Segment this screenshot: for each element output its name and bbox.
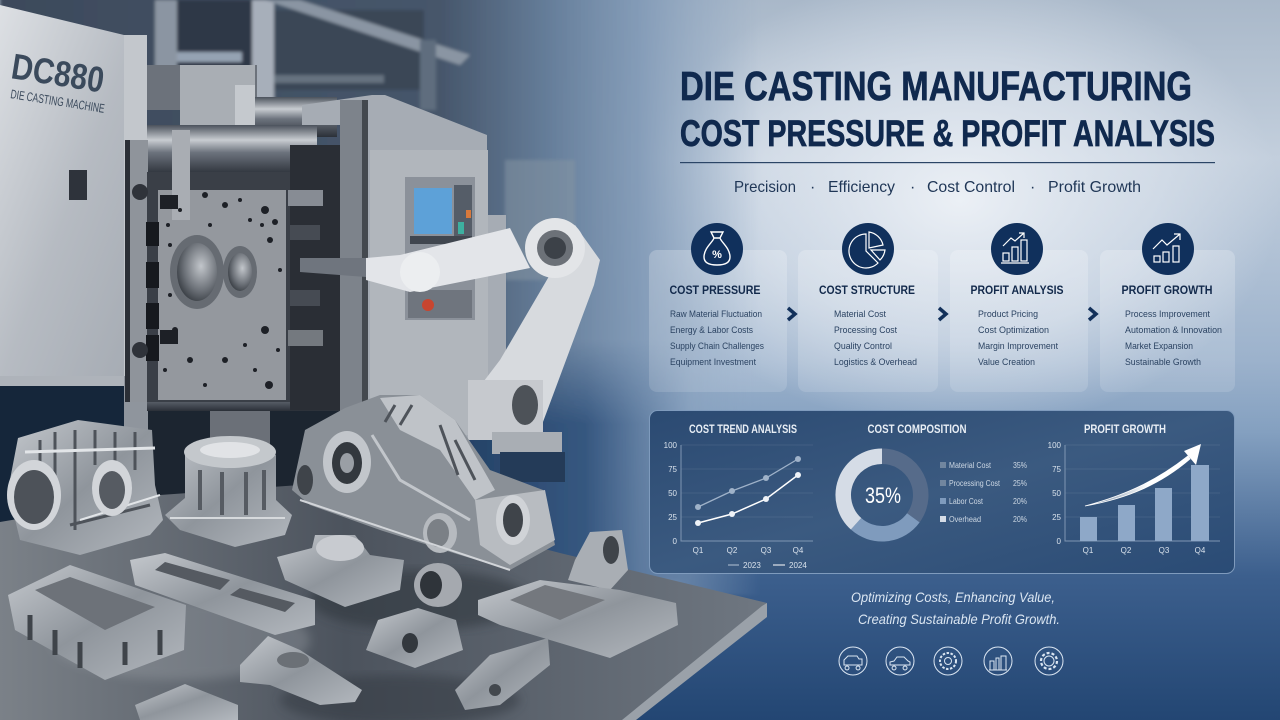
tagline: Cost Control bbox=[927, 179, 1015, 196]
tagline: Efficiency bbox=[828, 179, 895, 196]
closing statement: Optimizing Costs, Enhancing Value, bbox=[851, 589, 1055, 605]
cast part: small cube bbox=[366, 608, 463, 668]
donut legend: Material Cost bbox=[949, 461, 992, 470]
machine main housing with model label bbox=[0, 5, 147, 385]
list: Quality Control bbox=[834, 341, 892, 352]
chart: cost trend analysis: 50 bbox=[668, 489, 678, 498]
list bbox=[978, 309, 1058, 368]
heading: PROFIT ANALYSIS bbox=[970, 283, 1064, 297]
cast part: long frame bbox=[130, 553, 315, 635]
chart: cost composition bbox=[843, 424, 1027, 534]
panel: charts bbox=[650, 410, 1234, 574]
chart: profit growth: Q2 bbox=[1121, 546, 1132, 555]
chart: profit growth: Q3 bbox=[1159, 546, 1170, 555]
list: Value Creation bbox=[978, 357, 1035, 368]
panel: profit analysis bbox=[950, 223, 1088, 392]
icon: car bbox=[886, 647, 914, 675]
emergency stop bbox=[422, 299, 434, 311]
list: Equipment Investment bbox=[670, 357, 756, 368]
icon: pie chart bbox=[842, 223, 894, 275]
chart: profit growth bbox=[1048, 424, 1220, 555]
tagline: · bbox=[1030, 179, 1035, 196]
closing statement: Creating Sustainable Profit Growth. bbox=[858, 611, 1060, 627]
factory background bbox=[0, 0, 770, 595]
donut legend: Overhead bbox=[949, 515, 981, 524]
cast part: flange bbox=[414, 563, 462, 607]
cast part: left housing bbox=[7, 420, 163, 555]
donut legend: 20% bbox=[1013, 497, 1027, 506]
chart: cost trend analysis: COST TREND ANALYSIS bbox=[689, 424, 797, 436]
chart: cost trend analysis: 0 bbox=[673, 537, 678, 546]
heading: COST PRESSURE bbox=[670, 283, 760, 297]
list: Energy & Labor Costs bbox=[670, 325, 753, 336]
photo: die casting machine and cast parts bbox=[0, 0, 770, 720]
panel: cost pressure bbox=[649, 223, 787, 392]
control screen bbox=[414, 188, 452, 234]
mold platen bbox=[125, 130, 340, 410]
right machine column with control panel bbox=[302, 95, 506, 445]
steel table bbox=[0, 485, 767, 720]
title bbox=[680, 63, 1215, 154]
icon: money bag bbox=[691, 223, 743, 275]
chart: cost trend analysis: 100 bbox=[664, 441, 678, 450]
list: Processing Cost bbox=[834, 325, 897, 336]
list: Sustainable Growth bbox=[1125, 357, 1201, 368]
tagline: · bbox=[810, 179, 815, 196]
title rule bbox=[680, 162, 1215, 163]
chart: cost composition: COST COMPOSITION bbox=[868, 424, 966, 436]
cast part: bracket bbox=[240, 636, 362, 705]
chart: profit growth: PROFIT GROWTH bbox=[1084, 424, 1166, 436]
icon row bbox=[839, 647, 1063, 675]
lower machine base bbox=[0, 376, 418, 526]
chart: profit growth: 100 bbox=[1048, 441, 1062, 450]
legend: 2023 bbox=[743, 561, 761, 570]
icon: truck bbox=[839, 647, 867, 675]
tie bars bbox=[147, 65, 342, 411]
machine type label: DIE CASTING MACHINE bbox=[10, 87, 106, 116]
line 2024 bbox=[695, 472, 801, 526]
growth arrow bbox=[1085, 444, 1201, 506]
arrow 3 bbox=[1089, 308, 1096, 320]
chart: profit growth: Q4 bbox=[1195, 546, 1206, 555]
list: Cost Optimization bbox=[978, 325, 1049, 336]
chart: profit growth: 75 bbox=[1052, 465, 1062, 474]
line 2023 bbox=[695, 456, 801, 510]
list: Automation & Innovation bbox=[1125, 325, 1222, 336]
cast part: right tray with bracket bbox=[478, 530, 678, 658]
cast part: foreground tray bbox=[135, 684, 238, 720]
cast part: flat block left bbox=[8, 565, 186, 680]
arrow 1 bbox=[788, 308, 795, 320]
list bbox=[1125, 309, 1222, 368]
icon: growth chart bbox=[1142, 223, 1194, 275]
chart: cost trend analysis: Q1 bbox=[693, 546, 704, 555]
icon: bars and arrow bbox=[991, 223, 1043, 275]
chart: profit growth: 25 bbox=[1052, 513, 1062, 522]
donut legend: Processing Cost bbox=[949, 479, 1001, 488]
list bbox=[670, 309, 764, 368]
tagline bbox=[734, 179, 1141, 196]
icon: gear bbox=[1035, 647, 1063, 675]
robot arm bbox=[300, 218, 600, 482]
legend: 2024 bbox=[789, 561, 807, 570]
donut legend: Labor Cost bbox=[949, 497, 984, 506]
chart: cost trend analysis: Q2 bbox=[727, 546, 738, 555]
panel: profit growth bbox=[1100, 223, 1235, 392]
tagline: Profit Growth bbox=[1048, 179, 1141, 196]
chart: cost trend analysis: Q4 bbox=[793, 546, 804, 555]
chart: profit growth: 0 bbox=[1057, 537, 1062, 546]
cast part: rib block bbox=[455, 638, 550, 710]
chart: profit growth: Q1 bbox=[1083, 546, 1094, 555]
list: Logistics & Overhead bbox=[834, 357, 917, 368]
cast part: large gearbox bbox=[292, 395, 555, 570]
chart: cost trend analysis: 25 bbox=[668, 513, 678, 522]
cast part: center block bbox=[277, 535, 404, 607]
panel: cost structure bbox=[798, 223, 938, 392]
list: Product Pricing bbox=[978, 309, 1038, 320]
donut legend bbox=[940, 461, 1027, 524]
donut legend: 25% bbox=[1013, 479, 1027, 488]
list: Margin Improvement bbox=[978, 341, 1058, 352]
list: Supply Chain Challenges bbox=[670, 341, 764, 352]
closing statement bbox=[851, 589, 1060, 627]
donut legend: 20% bbox=[1013, 515, 1027, 524]
icon: turbine bbox=[934, 647, 962, 675]
list: Raw Material Fluctuation bbox=[670, 309, 762, 320]
heading: COST STRUCTURE bbox=[819, 283, 915, 297]
icon: factory workers bbox=[984, 647, 1012, 675]
list: Process Improvement bbox=[1125, 309, 1210, 320]
heading: PROFIT GROWTH bbox=[1122, 283, 1212, 297]
donut legend: 35% bbox=[1013, 461, 1027, 470]
chart: cost composition: 35% bbox=[865, 483, 901, 508]
list bbox=[834, 309, 917, 368]
cast part: cylinder housing bbox=[165, 436, 292, 547]
chart: cost trend analysis: 75 bbox=[668, 465, 678, 474]
arrow 2 bbox=[939, 308, 946, 320]
model name: DC880 bbox=[9, 45, 107, 100]
tagline: · bbox=[910, 179, 915, 196]
list: Market Expansion bbox=[1125, 341, 1193, 352]
list: Material Cost bbox=[834, 309, 886, 320]
legend bbox=[728, 561, 807, 570]
chart: cost trend analysis bbox=[664, 424, 813, 570]
tagline: Precision bbox=[734, 179, 796, 196]
icon: money bag: % bbox=[712, 249, 722, 261]
chart: profit growth: 50 bbox=[1052, 489, 1062, 498]
chart: cost trend analysis: Q3 bbox=[761, 546, 772, 555]
